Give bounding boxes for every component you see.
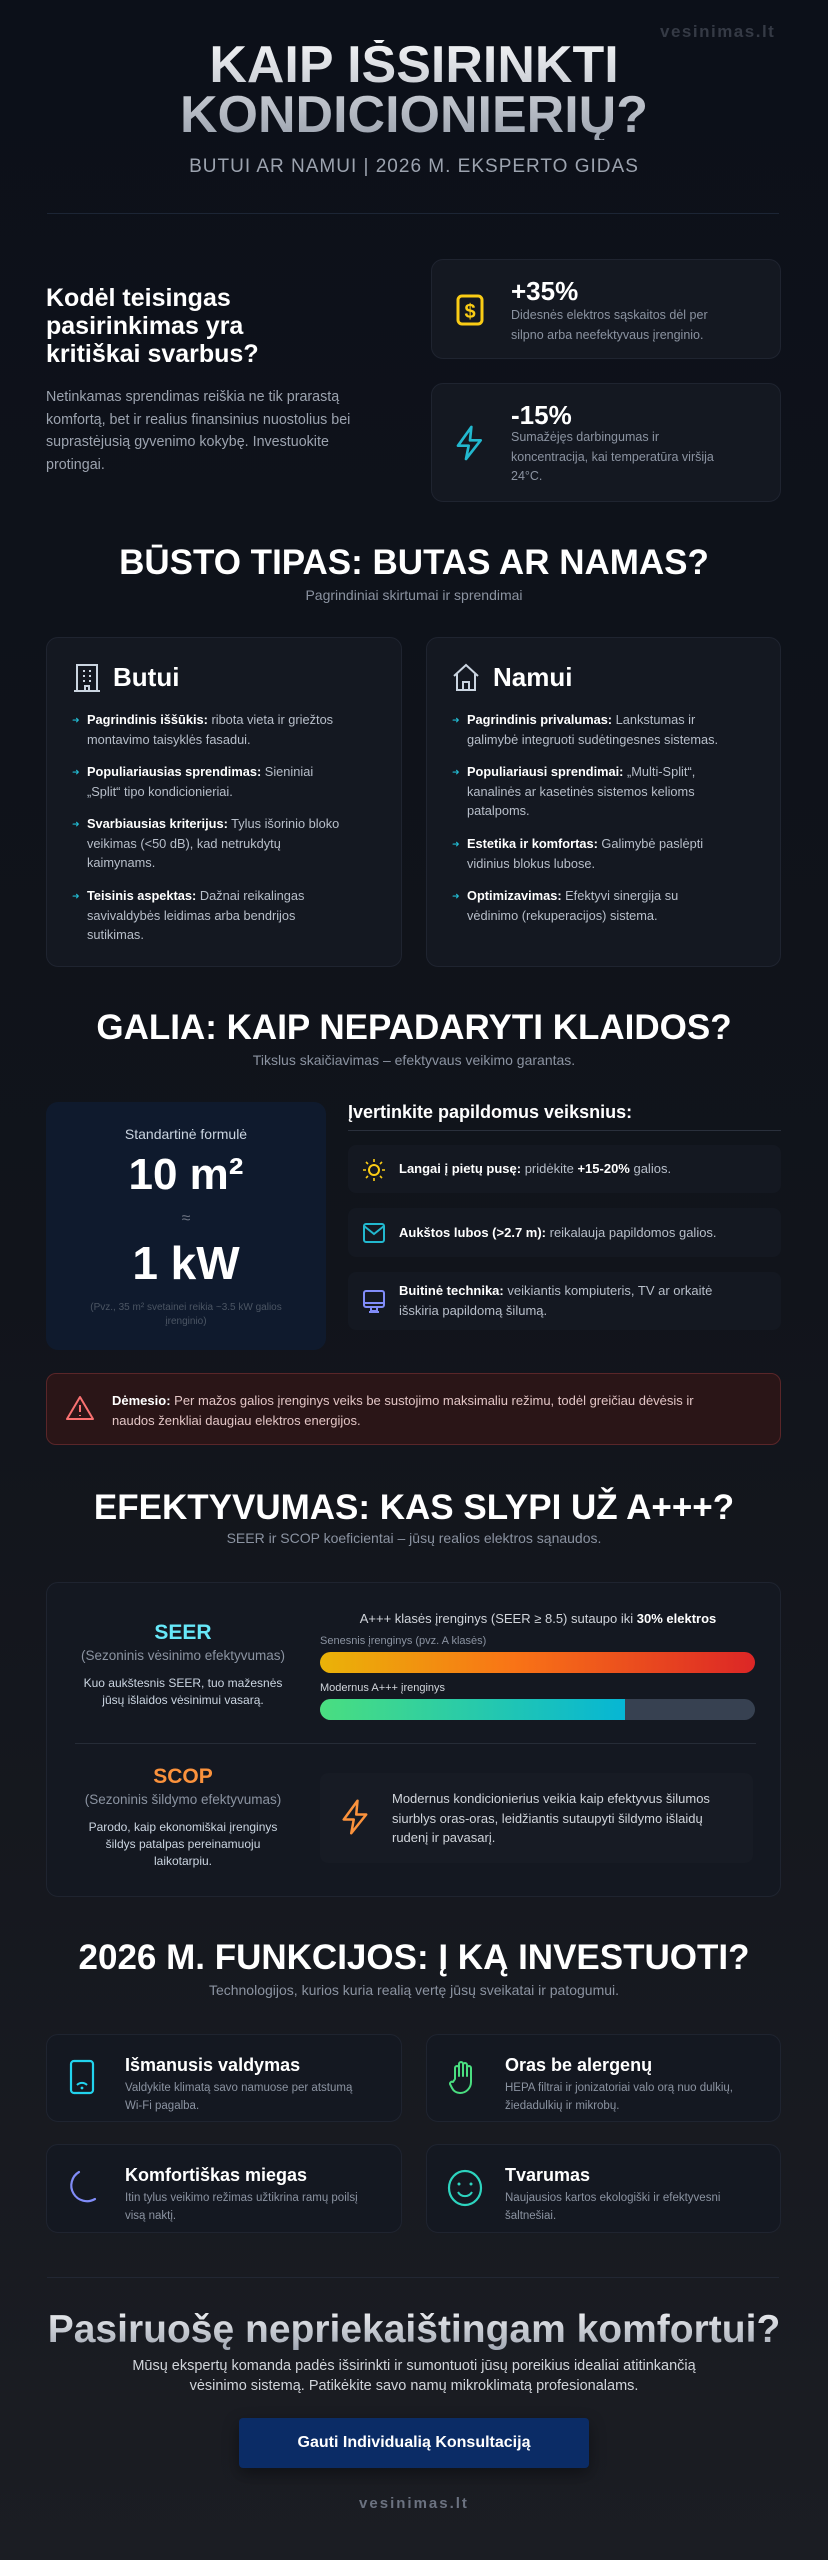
footer watermark: vesinimas.lt: [359, 2495, 469, 2512]
intro paragraph: komfortą, bet ir realius finansinius nuostolius bei: [46, 412, 350, 428]
panel: namui: Pagrindinis privalumas: Lankstumas ir: [467, 712, 695, 727]
panel: namui: galimybė integruoti sudėtingesnes sistemas.: [467, 732, 718, 746]
feature: sleep: visą naktį.: [125, 2210, 176, 2222]
icon: smile: [448, 2170, 482, 2206]
panel: namui: vidinius blokus lubose.: [467, 856, 595, 870]
feature: smart control: Valdykite klimatą savo namuose per atstumą: [125, 2082, 352, 2094]
heading: efektyvumas: EFEKTYVUMAS: KAS SLYPI UŽ A+++?: [94, 1488, 734, 1527]
icon: box: [363, 1223, 385, 1243]
panel: namui: Estetika ir komfortas: Galimybė paslėpti: [467, 836, 703, 851]
SCOP block: Parodo, kaip ekonomiškai įrenginys: [89, 1820, 277, 1834]
factors heading: Įvertinkite papildomus veiksnius:: [348, 1102, 632, 1122]
intro heading: pasirinkimas yra: [46, 312, 243, 340]
formula box: Standartinė formulė: [125, 1126, 247, 1142]
SCOP callout: [320, 1773, 753, 1863]
bar chart: A+++ klasės įrenginys (SEER ≥ 8.5) sutaupo iki 30% elektros: [360, 1611, 716, 1626]
feature: sustainability: šaltnešiai.: [505, 2210, 556, 2222]
panel: butui: Teisinis aspektas: Dažnai reikalingas: [87, 888, 304, 903]
SCOP block: (Sezoninis šildymo efektyvumas): [85, 1792, 281, 1807]
warning callout: [46, 1373, 781, 1445]
icon: money: $: [464, 301, 476, 323]
card title: Namui: [493, 662, 572, 692]
stat card -15%: koncentracija, kai temperatūra viršija: [511, 450, 714, 464]
title: [0, 40, 828, 140]
feature: sustainability: Tvarumas: [505, 2165, 590, 2185]
formula box: įrenginio): [165, 1316, 207, 1327]
feature: sustainability: [426, 2144, 781, 2233]
intro heading: [46, 284, 259, 368]
intro paragraph: Netinkamas sprendimas reiškia ne tik prarastą: [46, 389, 339, 405]
feature: smart control: [46, 2034, 402, 2122]
panel: butui: montavimo taisyklės fasadui.: [87, 732, 251, 746]
subtitle: BUTUI AR NAMUI | 2026 M. EKSPERTO GIDAS: [189, 156, 639, 177]
watermark top: vesinimas.lt: [660, 22, 775, 41]
icon: money: [456, 294, 484, 326]
intro paragraph: protingai.: [46, 457, 105, 473]
SEER block: (Sezoninis vėsinimo efektyvumas): [81, 1648, 285, 1663]
heading: busto tipas: BŪSTO TIPAS: BUTAS AR NAMAS?: [119, 543, 709, 582]
CTA paragraph: Mūsų ekspertų komanda padės išsirinkti ir sumontuoti jūsų poreikius idealiai atitinkančią: [132, 2358, 696, 2374]
heading: galia: GALIA: KAIP NEPADARYTI KLAIDOS?: [96, 1008, 732, 1047]
CTA paragraph: vėsinimo sistemą. Patikėkite savo namų mikroklimatą profesionalams.: [190, 2378, 638, 2394]
formula box: 1 kW: [132, 1237, 240, 1289]
factor: appliances: išskiria papildomą šilumą.: [399, 1302, 547, 1318]
panel: butui: sutikimas.: [87, 927, 144, 942]
SCOP block: SCOP: [153, 1765, 213, 1788]
icon: house: [453, 664, 479, 691]
formula box: [46, 1102, 326, 1350]
title: KAIP IŠSIRINKTI: [209, 36, 619, 94]
subheading: SEER ir SCOP koeficientai – jūsų realios elektros sąnaudos.: [227, 1530, 601, 1546]
panel: butui: kaimynams.: [87, 855, 155, 870]
feature: smart control: Išmanusis valdymas: [125, 2055, 300, 2075]
icon: moon: [70, 2170, 96, 2202]
heading: funkcijos: 2026 M. FUNKCIJOS: Į KĄ INVESTUOTI?: [79, 1938, 749, 1977]
SEER block: [81, 1621, 285, 1707]
SCOP callout: rudenį ir pavasarį.: [392, 1830, 495, 1845]
panel: butui: [46, 637, 402, 967]
panel: butui: Svarbiausias kriterijus: Tylus išorinio bloko: [87, 816, 339, 831]
icon: bolt: [456, 426, 482, 460]
feature: allergen-free: žiedadulkių ir mikrobų.: [505, 2100, 619, 2112]
CTA button: Gauti Individualią Konsultaciją: [298, 2434, 530, 2451]
stat card -15%: -15%: [511, 400, 572, 430]
CTA heading: Pasiruošę nepriekaištingam komfortui?: [48, 2308, 780, 2351]
stat card +35%: [431, 259, 781, 359]
formula box: (Pvz., 35 m² svetainei reikia ~3.5 kW galios: [90, 1302, 282, 1313]
stat card -15%: [431, 383, 781, 502]
feature: allergen-free: [426, 2034, 781, 2122]
stat card +35%: silpno arba neefektyvaus įrenginio.: [511, 328, 703, 342]
SCOP block: šildys patalpas pereinamuoju: [106, 1837, 260, 1851]
bar chart: Modernus A+++ įrenginys: [320, 1682, 445, 1694]
stat card +35%: Didesnės elektros sąskaitos dėl per: [511, 308, 708, 322]
factor: appliances: Buitinė technika: veikiantis kompiuteris, TV ar orkaitė: [399, 1283, 712, 1298]
formula box: ≈: [182, 1210, 190, 1227]
card title: Butui: [113, 662, 179, 692]
panel: butui: savivaldybės leidimas arba bendrijos: [87, 908, 295, 922]
warning callout: naudos ženkliai daugiau elektros energijos.: [112, 1412, 361, 1428]
factor: ceilings: [348, 1208, 781, 1257]
stat card +35%: +35%: [511, 276, 578, 306]
feature: sustainability: Naujausios kartos ekologiški ir efektyvesni: [505, 2192, 720, 2204]
icon: building: [74, 664, 100, 692]
intro heading: Kodėl teisingas: [46, 284, 231, 312]
SEER block: Kuo aukštesnis SEER, tuo mažesnės: [84, 1676, 282, 1690]
stat card -15%: Sumažėjęs darbingumas ir: [511, 430, 659, 444]
CTA paragraph: [132, 2358, 696, 2394]
feature: allergen-free: Oras be alergenų: [505, 2055, 652, 2075]
SCOP callout: siurblys oras-oras, leidžiantis sutaupyti šildymo išlaidų: [392, 1810, 703, 1826]
icon: monitor: [363, 1290, 385, 1313]
panel: butui: veikimas (<50 dB), kad netrukdytų: [87, 836, 281, 850]
factor: ceilings: Aukštos lubos (>2.7 m): reikalauja papildomos galios.: [399, 1225, 717, 1240]
SCOP block: laikotarpiu.: [154, 1854, 212, 1868]
icon: warning: [66, 1396, 94, 1420]
panel: namui: patalpoms.: [467, 803, 530, 818]
title: KONDICIONIERIŲ?: [180, 86, 648, 144]
icon: phone wifi: [70, 2060, 94, 2094]
panel: butui: Populiariausias sprendimas: Sieniniai: [87, 764, 313, 779]
warning callout: Dėmesio: Per mažos galios įrenginys veiks be sustojimo maksimaliu režimu, todėl greičiau dėvėsis ir: [112, 1393, 694, 1408]
feature: smart control: Wi-Fi pagalba.: [125, 2100, 199, 2112]
subheading: Tikslus skaičiavimas – efektyvaus veikimo garantas.: [253, 1052, 575, 1068]
panel: namui: Optimizavimas: Efektyvi sinergija su: [467, 888, 678, 903]
intro paragraph: suprastėjusią gyvenimo kokybę. Investuokite: [46, 434, 329, 450]
feature: sleep: Komfortiškas miegas: [125, 2165, 307, 2185]
stat card -15%: 24°C.: [511, 469, 542, 483]
panel: butui: „Split“ tipo kondicionieriai.: [87, 784, 233, 798]
bar chart: Senesnis įrenginys (pvz. A klasės): [320, 1635, 486, 1647]
factor: windows: Langai į pietų pusę: pridėkite +15-20% galios.: [399, 1161, 671, 1176]
panel: efficiency: [46, 1582, 781, 1897]
intro heading: kritiškai svarbus?: [46, 340, 259, 368]
icon: sun: [363, 1159, 385, 1181]
subheading: Technologijos, kurios kuria realią vertę jūsų sveikatai ir patogumui.: [209, 1982, 619, 1998]
panel: namui: [426, 637, 781, 967]
formula box: 10 m²: [129, 1150, 243, 1199]
panel: butui: Pagrindinis iššūkis: ribota vieta ir griežtos: [87, 712, 333, 727]
SCOP callout: Modernus kondicionierius veikia kaip efektyvus šilumos: [392, 1791, 710, 1806]
feature: sleep: [46, 2144, 402, 2233]
panel: namui: kanalinės ar kasetinės sistemos kelioms: [467, 784, 695, 798]
subheading: Pagrindiniai skirtumai ir sprendimai: [305, 587, 523, 603]
bar chart: [320, 1611, 755, 1720]
icon: bolt: [342, 1800, 368, 1834]
factor: windows: [348, 1145, 781, 1193]
panel: namui: vėdinimo (rekuperacijos) sistema.: [467, 908, 658, 922]
feature: allergen-free: HEPA filtrai ir jonizatoriai valo orą nuo dulkių,: [505, 2082, 733, 2094]
SCOP block: [85, 1765, 281, 1868]
feature: sleep: Itin tylus veikimo režimas užtikrina ramų poilsį: [125, 2192, 358, 2204]
CTA button: [239, 2418, 589, 2468]
icon: hand: [449, 2061, 472, 2094]
intro paragraph: [46, 389, 350, 473]
SEER block: SEER: [154, 1621, 212, 1644]
SEER block: jūsų išlaidos vėsinimui vasarą.: [102, 1693, 264, 1707]
panel: namui: Populiariausi sprendimai: „Multi-Split“,: [467, 764, 695, 779]
factor: appliances: [348, 1272, 781, 1330]
